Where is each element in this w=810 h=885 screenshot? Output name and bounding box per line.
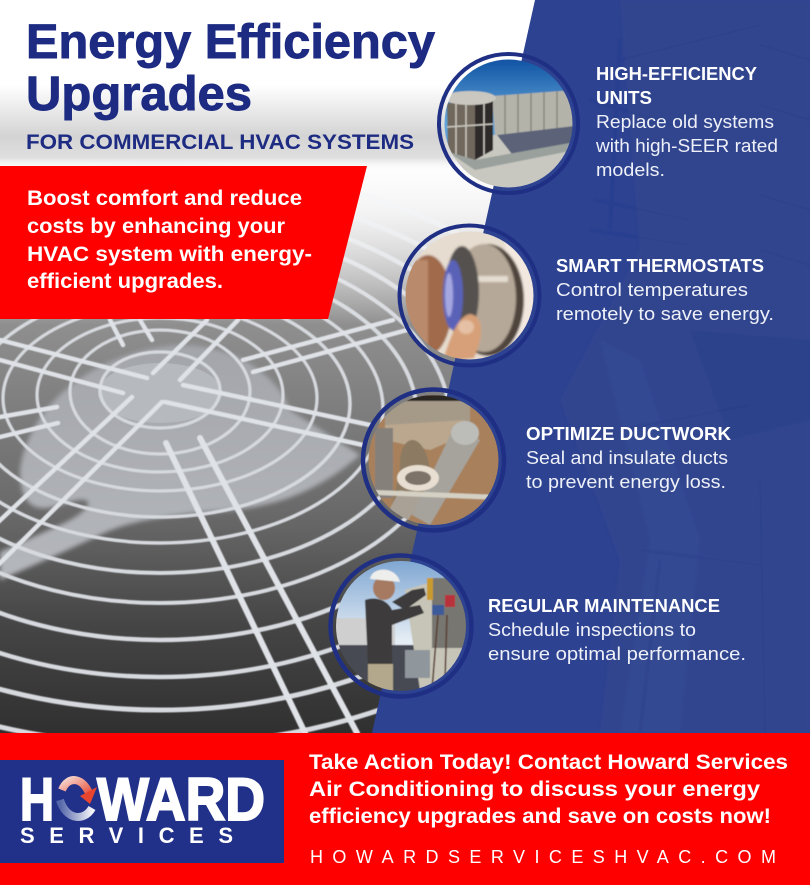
logo: Howard Services: H [20,766,54,833]
text: regular maintenance: ensure optimal performance. [488,643,746,664]
text: high-efficiency units: HIGH-EFFICIENCY [596,63,758,84]
text: smart thermostats: remotely to save energy. [556,303,774,324]
panel: high-efficiency units [439,54,778,195]
call to action text: Take Action Today! Contact Howard Services [309,750,788,774]
white fade over top of the fan [0,150,540,325]
logo: Howard Services: WARD [97,766,265,833]
intro text: costs by enhancing your [27,215,285,238]
text: high-efficiency units: with high-SEER rated [595,135,778,156]
grey band behind subtitle [0,85,540,170]
fan grille rings [0,165,620,745]
text: regular maintenance: REGULAR MAINTENANCE [488,595,720,616]
panel: smart thermostats [400,226,774,366]
icon: circular arrows [60,780,97,817]
text: smart thermostats: SMART THERMOSTATS [556,255,764,276]
website url: HOWARDSERVICESHVAC.COM [310,847,776,867]
text: optimize ductwork: to prevent energy loss. [526,471,726,492]
intro text [27,187,312,293]
text: regular maintenance [488,595,746,664]
photo: rooftop units [439,54,580,195]
intro text: Boost comfort and reduce [27,187,302,210]
logo: Howard Services: SERVICES [20,823,233,848]
photo: technician [330,556,472,696]
title: Upgrades [26,68,252,121]
call to action text [309,750,788,828]
text: high-efficiency units: UNITS [596,87,652,108]
photo: thermostat [400,226,540,366]
text: high-efficiency units [595,63,778,180]
logo: Howard Services [0,760,284,863]
text: regular maintenance: Schedule inspections to [488,619,696,640]
text: smart thermostats: Control temperatures [556,279,748,300]
panel: red intro banner [0,166,367,319]
intro text: efficient upgrades. [27,270,223,293]
title: Energy Efficiency [26,16,435,69]
text: optimize ductwork: OPTIMIZE DUCTWORK [526,423,732,444]
text: optimize ductwork [526,423,732,492]
panel: regular maintenance [330,556,746,696]
title [26,16,435,121]
call to action text: efficiency upgrades and save on costs now! [309,804,771,828]
motor hub [0,345,360,580]
panel: red footer [0,733,810,885]
text: high-efficiency units: Replace old systems [596,111,774,132]
subtitle: FOR COMMERCIAL HVAC SYSTEMS [26,131,414,154]
panel: optimize ductwork [363,390,732,532]
text: optimize ductwork: Seal and insulate ducts [526,447,728,468]
intro text: HVAC system with energy- [27,243,312,266]
text: high-efficiency units: models. [596,159,665,180]
text: smart thermostats [556,255,774,324]
photo: ducts [363,390,505,532]
panel: blue duct background [372,0,810,733]
call to action text: Air Conditioning to discuss your energy [309,777,760,801]
fan grille spokes [0,320,407,733]
hub cap [98,363,222,423]
